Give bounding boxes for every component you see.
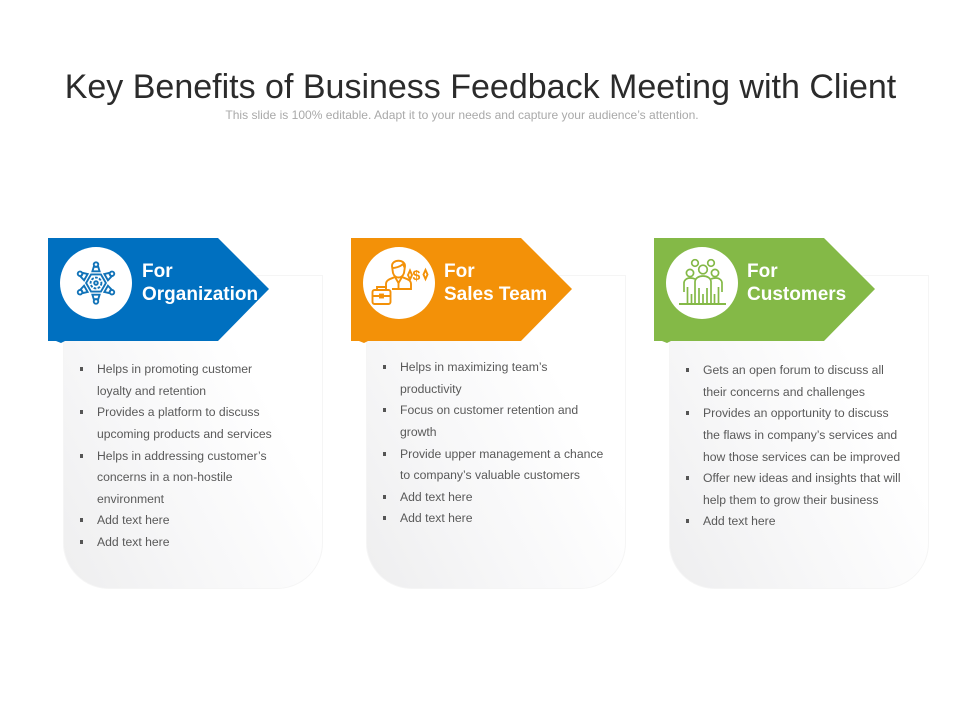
heading: for sales team (444, 261, 547, 305)
bullet list: organization: concerns in a non-hostile (97, 470, 232, 484)
bullet list: customers (686, 363, 901, 528)
heading: for customers (747, 261, 846, 305)
bullet list: organization: Helps in addressing customer’s (97, 449, 267, 463)
icon: organization circle (60, 247, 132, 319)
bullet list: sales team: Add text here (400, 490, 472, 504)
icon: sales team circle (363, 247, 435, 319)
bullet list: customers: Provides an opportunity to discuss (703, 406, 889, 420)
bullet list: sales team: growth (400, 425, 437, 439)
bullet list: customers: Add text here (703, 514, 776, 528)
heading: for customers: For (747, 261, 778, 282)
bullet list: organization: upcoming products and services (97, 427, 272, 441)
bullet list: customers: Offer new ideas and insights that will (703, 471, 901, 485)
arrow banner: sales team (351, 238, 572, 343)
bullet list: sales team: to company’s valuable customers (400, 468, 580, 482)
bullet list: sales team: Add text here (400, 511, 472, 525)
bullet list: sales team: Provide upper management a chance (400, 447, 603, 461)
bullet list: customers: Gets an open forum to discuss all (703, 363, 884, 377)
panel: for sales team (351, 238, 626, 589)
heading: for organization (142, 261, 258, 305)
bullet list: sales team: Helps in maximizing team’s (400, 360, 547, 374)
subtitle: This slide is 100% editable. Adapt it to your needs and capture your audience’s attention. (225, 108, 699, 122)
heading: for customers: Customers (747, 284, 846, 305)
heading: for sales team: Sales Team (444, 284, 547, 305)
heading: for sales team: For (444, 261, 475, 282)
panel: for customers (654, 238, 929, 589)
arrow banner: customers (654, 238, 875, 343)
bullet list: customers: the flaws in company’s services and (703, 428, 897, 442)
panel: for organization (48, 238, 323, 589)
icon: dollar sign: $ (412, 267, 420, 283)
bullet list: organization: loyalty and retention (97, 384, 206, 398)
bullet list: organization: Add text here (97, 535, 170, 549)
bullet list: sales team: productivity (400, 382, 462, 396)
card: sales team (366, 275, 626, 589)
heading: for organization: For (142, 261, 173, 282)
bullet list: customers: their concerns and challenges (703, 385, 865, 399)
heading: for organization: Organization (142, 284, 258, 305)
bullet list: organization: Provides a platform to discuss (97, 405, 260, 419)
bullet list: organization: environment (97, 492, 164, 506)
bullet list: customers: how those services can be improved (703, 450, 900, 464)
bullet list: organization: Helps in promoting customer (97, 362, 252, 376)
card: organization (63, 275, 323, 589)
arrow banner: organization (48, 238, 269, 343)
bullet list: organization (80, 362, 272, 549)
bullet list: organization: Add text here (97, 513, 170, 527)
card: customers (669, 275, 929, 589)
bullet list: customers: help them to grow their business (703, 493, 878, 507)
bullet list: sales team: Focus on customer retention and (400, 403, 578, 417)
icon: customers circle (666, 247, 738, 319)
title: Key Benefits of Business Feedback Meeting with Client (65, 68, 896, 106)
bullet list: sales team (383, 360, 603, 525)
